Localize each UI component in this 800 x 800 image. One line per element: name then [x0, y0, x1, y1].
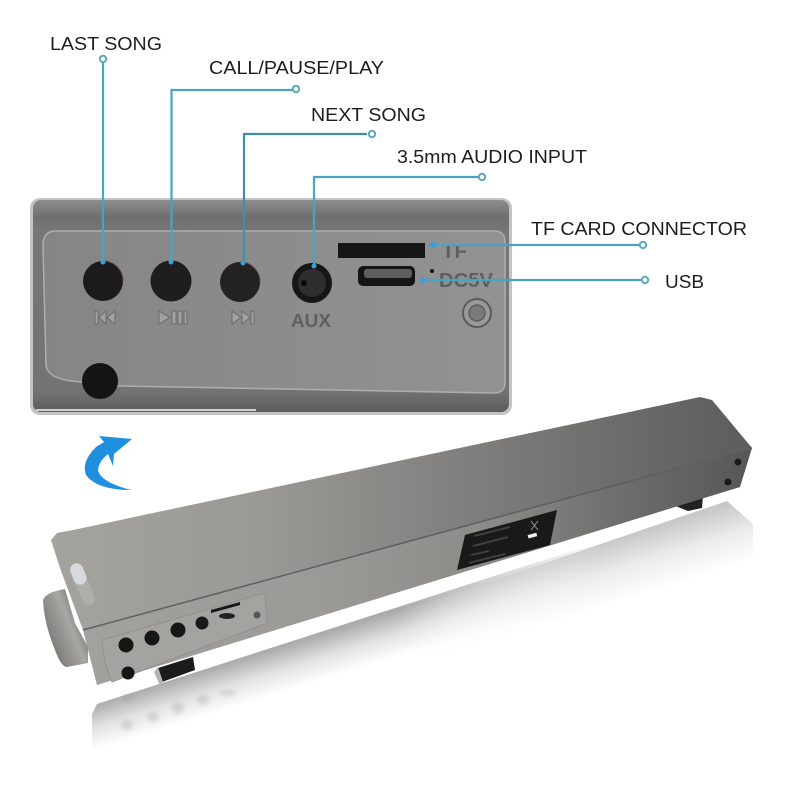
- front edge highlight: [83, 448, 752, 630]
- callout: next song: NEXT SONG: [311, 105, 426, 125]
- callout: audio input: 3.5mm AUDIO INPUT: [397, 147, 587, 167]
- front face: [83, 448, 752, 685]
- icon: previous symbol: [95, 311, 115, 324]
- button: play pause: [150, 260, 192, 302]
- volume knob: [43, 589, 88, 667]
- usb port: [358, 266, 415, 286]
- icon: blue curved arrow: [85, 436, 132, 490]
- callout: usb: [420, 272, 704, 292]
- black rating label: [457, 510, 557, 570]
- printed port names: DC5V: [439, 270, 494, 292]
- callout: next song: [240, 105, 426, 266]
- foot left: [154, 657, 195, 686]
- aux jack: [292, 263, 332, 303]
- icon: next symbol: [232, 311, 254, 324]
- end holes: [724, 458, 742, 486]
- led dot: [430, 269, 434, 273]
- top surface: [51, 397, 752, 630]
- port panel: [102, 593, 267, 682]
- callout: last song: [50, 34, 162, 264]
- icon: play pause symbol: [159, 311, 187, 324]
- printed port names: [291, 241, 494, 331]
- callout: last song: LAST SONG: [50, 34, 162, 54]
- button: next: [220, 262, 260, 302]
- reset screw: [463, 299, 491, 327]
- inner port plate: [43, 231, 505, 393]
- callout: tf card connector: TF CARD CONNECTOR: [531, 219, 747, 239]
- callout: usb: USB: [665, 272, 704, 292]
- callout: audio input: [312, 147, 587, 268]
- callout: call pause play: CALL/PAUSE/PLAY: [209, 58, 384, 78]
- printed port names: TF: [442, 241, 467, 263]
- callout: call pause play: [168, 58, 384, 264]
- callout: tf card connector: [430, 219, 747, 248]
- button: previous: [83, 261, 123, 301]
- mounting hole: [82, 363, 118, 399]
- printed port names: AUX: [291, 311, 331, 331]
- reflection under soundbar: [92, 500, 753, 760]
- soundbar product photo: [43, 397, 752, 686]
- tf card slot: [338, 243, 425, 258]
- foot right: [673, 495, 703, 511]
- panel: enlarged port close-up: [30, 198, 512, 415]
- badge: [68, 561, 97, 607]
